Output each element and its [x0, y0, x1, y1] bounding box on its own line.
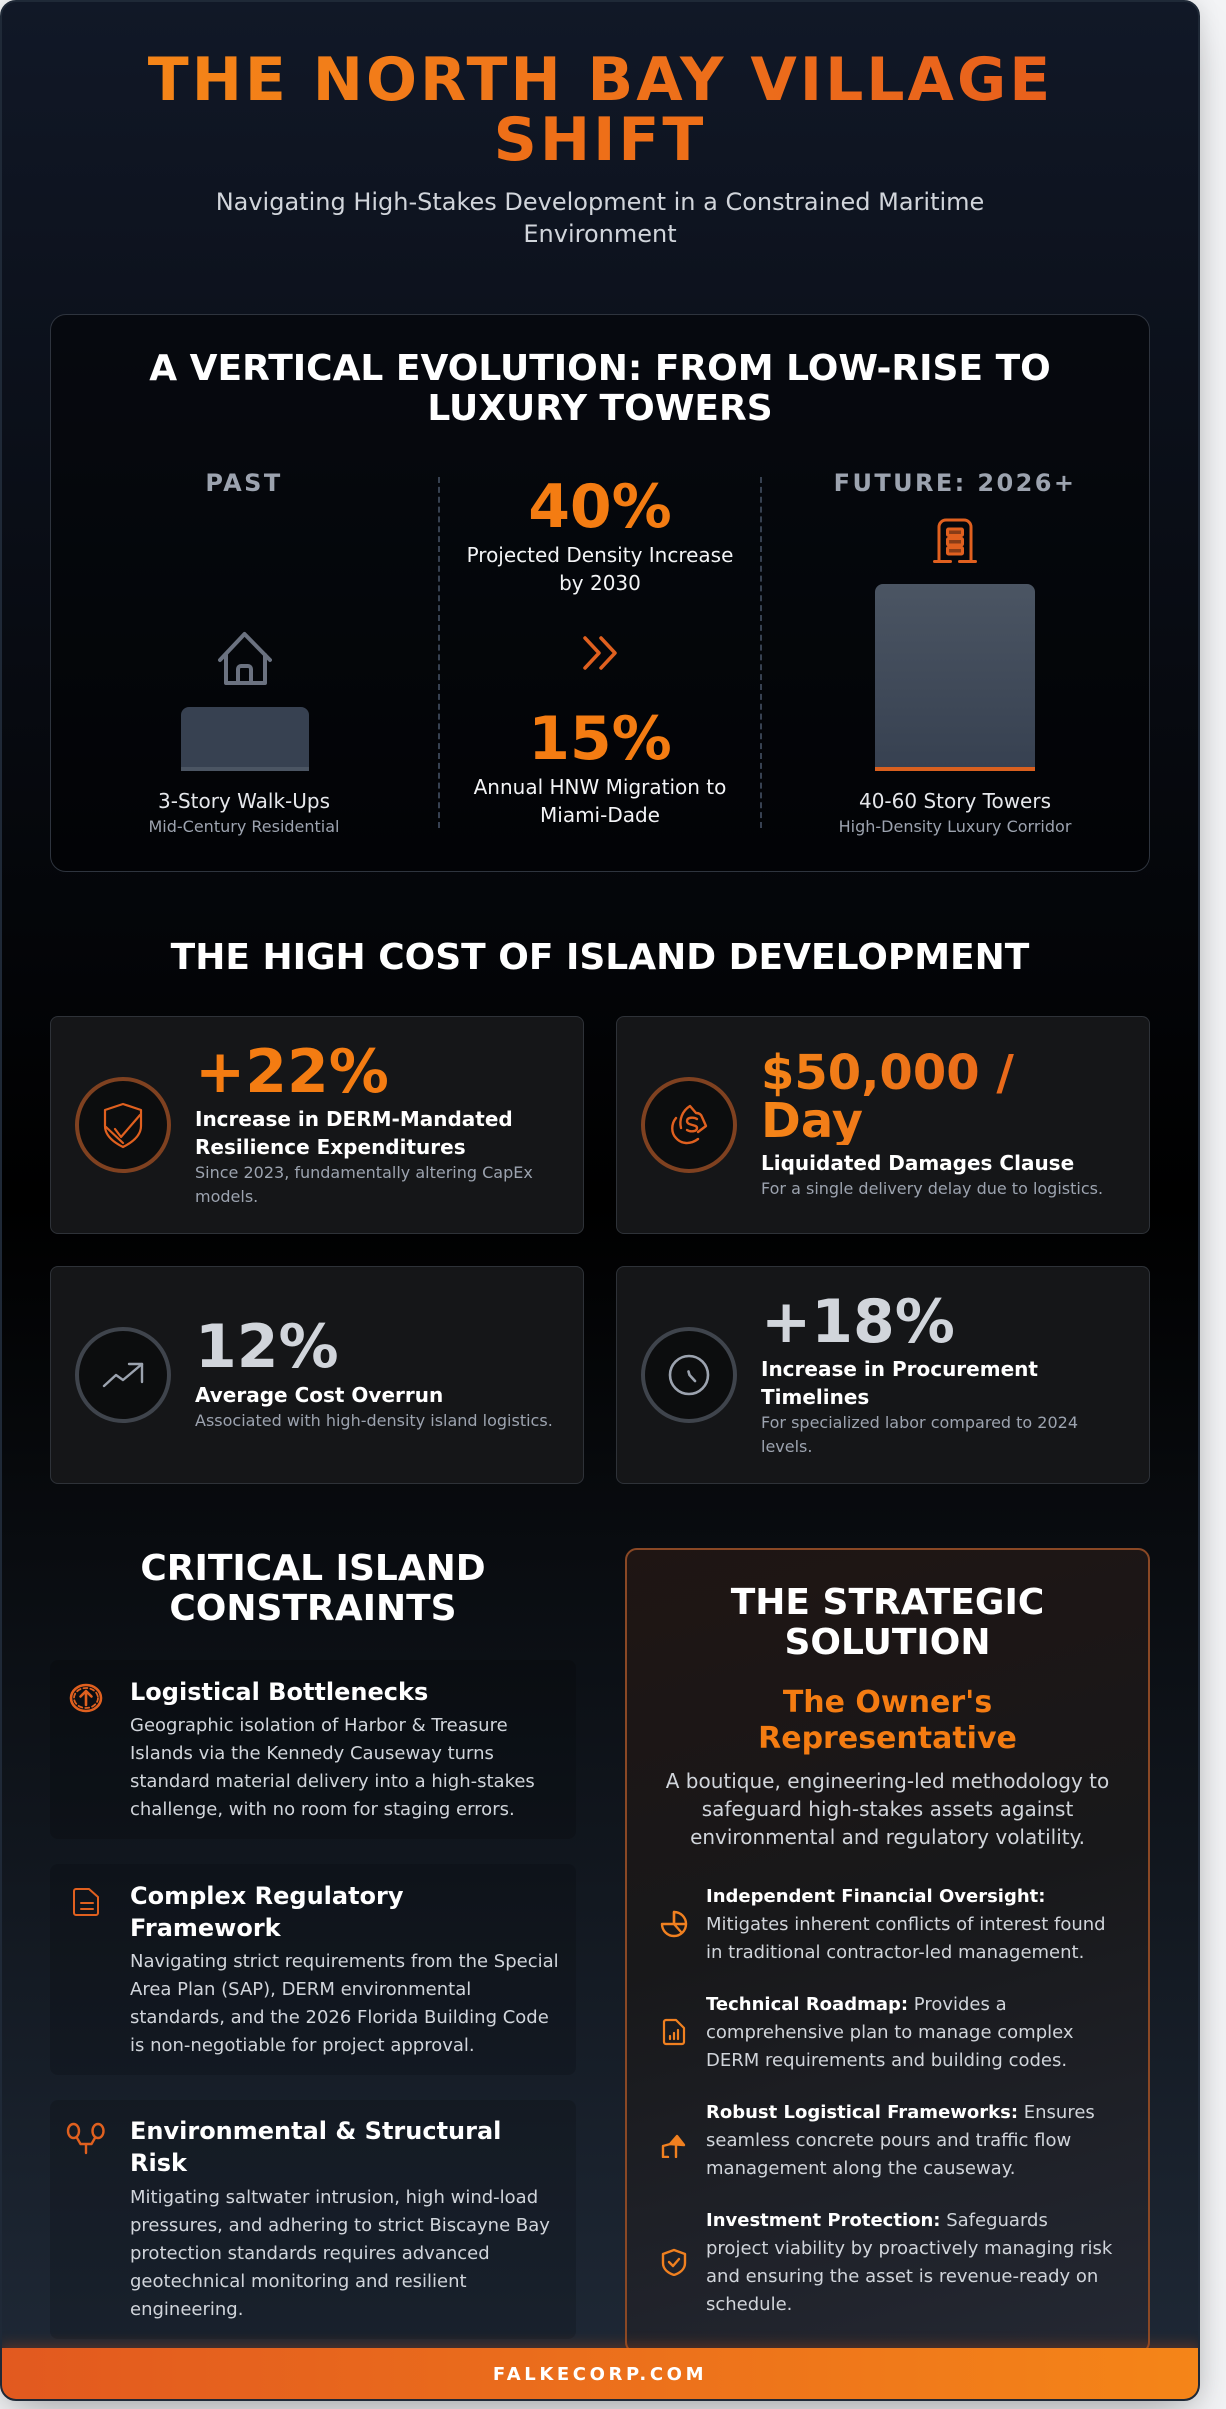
stat description: models. — [195, 1187, 258, 1206]
stat description — [761, 1413, 1078, 1456]
intro text: environmental and regulatory volatility. — [690, 1825, 1085, 1849]
icon: branches — [66, 2122, 105, 2154]
title: THE NORTH BAY VILLAGE — [148, 45, 1053, 115]
stat label — [761, 1357, 1038, 1409]
heading: vertical evolution: LUXURY TOWERS — [427, 388, 773, 429]
constraint text — [130, 1951, 559, 2056]
icon: document — [73, 1888, 99, 1916]
icon: chart document — [662, 2018, 686, 2046]
stat: 40%: 40% — [528, 472, 672, 542]
solution text: Mitigates inherent conflicts of interest found — [706, 1914, 1106, 1935]
constraint title: Framework — [130, 1914, 281, 1942]
card: $50,000 — [616, 1016, 1150, 1234]
solution text: in traditional contractor-led management. — [706, 1942, 1084, 1963]
constraint: regulatory — [50, 1864, 576, 2075]
stat label — [195, 1107, 513, 1159]
solution text — [706, 2210, 1112, 2315]
stat value: $50,000 / — [761, 1045, 1014, 1101]
heading — [730, 1582, 1044, 1663]
constraint title: Complex Regulatory — [130, 1882, 404, 1910]
building: tower block — [875, 584, 1035, 771]
icon ring: money — [641, 1077, 737, 1173]
stat label: Increase in Procurement — [761, 1357, 1038, 1381]
stat description: levels. — [761, 1437, 812, 1456]
heading: critical constraints — [140, 1548, 486, 1629]
constraint text: geotechnical monitoring and resilient — [130, 2271, 467, 2292]
solution text: Technical Roadmap: Provides a — [706, 1994, 1007, 2015]
stat description: Associated with high-density island logistics. — [195, 1411, 553, 1430]
label: future: FUTURE: 2026+ — [834, 469, 1076, 497]
solution text: schedule. — [706, 2294, 792, 2315]
icon: house — [218, 632, 272, 685]
heading: high cost: THE HIGH COST OF ISLAND DEVELOPMENT — [171, 937, 1029, 978]
subtitle: Navigating High-Stakes Development in a Constrained Maritime — [216, 188, 984, 216]
heading: vertical evolution: A VERTICAL EVOLUTION: FROM LOW-RISE TO — [149, 348, 1051, 389]
stat description: For specialized labor compared to 2024 — [761, 1413, 1078, 1432]
constraint text: Mitigating saltwater intrusion, high wind-load — [130, 2187, 538, 2208]
subheading: The Owner's — [783, 1685, 992, 1720]
constraint text: engineering. — [130, 2299, 243, 2320]
constraint text: pressures, and adhering to strict Biscayne Bay — [130, 2215, 550, 2236]
card: +22% — [50, 1016, 584, 1234]
divider right — [760, 477, 762, 828]
heading: critical constraints: CRITICAL ISLAND — [140, 1548, 486, 1589]
constraint text: standards, and the 2026 Florida Building Code — [130, 2007, 549, 2028]
solution text: Robust Logistical Frameworks: Ensures — [706, 2102, 1095, 2123]
stat value — [761, 1049, 1014, 1145]
constraint: environmental — [50, 2100, 576, 2339]
solution text — [706, 2102, 1095, 2179]
icon: chevrons — [583, 636, 617, 670]
text: annual migration: Annual HNW Migration to — [474, 775, 726, 799]
icon: tower — [933, 518, 977, 563]
divider left — [438, 477, 440, 828]
stat description — [195, 1163, 533, 1206]
icon: gear arrow — [70, 1684, 102, 1712]
icon ring: clock — [641, 1327, 737, 1423]
intro text: safeguard high-stakes assets against — [702, 1797, 1073, 1821]
constraint text: Islands via the Kennedy Causeway turns — [130, 1743, 494, 1764]
solution: logistics — [662, 2102, 1095, 2179]
caption: mid-century residential: Mid-Century Residential — [148, 817, 340, 836]
heading: vertical evolution — [149, 348, 1051, 429]
stat value: Day — [761, 1093, 863, 1149]
stat label: Timelines — [761, 1385, 869, 1409]
icon ring: shield — [75, 1077, 171, 1173]
constraint title: Risk — [130, 2149, 187, 2177]
stat value: 12% — [195, 1312, 339, 1382]
text: projected density — [467, 543, 733, 595]
text: annual migration: Miami-Dade — [540, 803, 660, 827]
icon: shield check — [662, 2248, 686, 2276]
icon: arrow up crane — [662, 2134, 686, 2158]
constraint text: challenge, with no room for staging errors. — [130, 1799, 515, 1820]
subtitle: Environment — [523, 220, 677, 248]
heading: THE STRATEGIC — [731, 1582, 1044, 1623]
stat description: For a single delivery delay due to logistics. — [761, 1179, 1103, 1198]
card: +18% — [616, 1266, 1150, 1484]
constraint title — [130, 2117, 501, 2177]
stat: 15%: 15% — [528, 704, 672, 774]
text: annual migration — [474, 775, 726, 827]
caption: 3-story walk-ups: 3-Story Walk-Ups — [158, 789, 330, 813]
panel: strategic solution — [625, 1548, 1150, 2354]
constraint text: standard material delivery into a high-stakes — [130, 1771, 535, 1792]
caption: 40-60 story towers: 40-60 Story Towers — [859, 789, 1051, 813]
icon ring: trend — [75, 1327, 171, 1423]
icon: pie — [660, 1910, 688, 1938]
solution text: management along the causeway. — [706, 2158, 1016, 2179]
heading: SOLUTION — [784, 1622, 991, 1663]
solution: protection — [662, 2210, 1112, 2315]
solution text: and ensuring the asset is revenue-ready on — [706, 2266, 1098, 2287]
subtitle — [216, 188, 984, 248]
subheading — [758, 1685, 1017, 1756]
constraint text: Geographic isolation of Harbor & Treasure — [130, 1715, 508, 1736]
text: projected density: Projected Density Increase — [467, 543, 733, 567]
building: low-rise block — [181, 707, 309, 771]
panel: vertical evolution — [50, 314, 1150, 872]
subheading: Representative — [758, 1721, 1017, 1756]
caption: high-density luxury corridor: High-Density Luxury Corridor — [839, 817, 1071, 836]
text: projected density: by 2030 — [559, 571, 641, 595]
constraint text: is non-negotiable for project approval. — [130, 2035, 475, 2056]
footer: FALKECORP.COM — [493, 2364, 707, 2385]
solution text — [706, 1886, 1106, 1963]
intro text — [666, 1769, 1109, 1849]
solution text: project viability by proactively managing risk — [706, 2238, 1112, 2259]
stat label: Liquidated Damages Clause — [761, 1151, 1074, 1175]
intro text: A boutique, engineering-led methodology to — [666, 1769, 1109, 1793]
constraint title — [130, 1882, 404, 1942]
footer — [0, 2348, 1200, 2401]
solution text: Independent Financial Oversight: — [706, 1886, 1045, 1907]
stat description: Since 2023, fundamentally altering CapEx — [195, 1163, 533, 1182]
solution text: DERM requirements and building codes. — [706, 2050, 1067, 2071]
title — [148, 45, 1053, 175]
stat label: Average Cost Overrun — [195, 1383, 443, 1407]
stat value: +18% — [761, 1287, 955, 1357]
solution: oversight — [660, 1886, 1106, 1963]
constraint text: protection standards requires advanced — [130, 2243, 490, 2264]
card: 12% — [50, 1266, 584, 1484]
solution text: seamless concrete pours and traffic flow — [706, 2130, 1071, 2151]
label: past: PAST — [205, 469, 283, 497]
solution: roadmap — [662, 1994, 1074, 2071]
title: SHIFT — [494, 105, 706, 175]
solution text: comprehensive plan to manage complex — [706, 2022, 1074, 2043]
constraint text — [130, 1715, 535, 1820]
solution text: Investment Protection: Safeguards — [706, 2210, 1048, 2231]
constraint text: Area Plan (SAP), DERM environmental — [130, 1979, 471, 2000]
heading: critical constraints: CONSTRAINTS — [169, 1588, 457, 1629]
constraint text: Navigating strict requirements from the Special — [130, 1951, 559, 1972]
constraint title: Logistical Bottlenecks — [130, 1678, 428, 1706]
constraint: logistical — [50, 1660, 576, 1839]
stat label: Resilience Expenditures — [195, 1135, 466, 1159]
constraint title: Environmental & Structural — [130, 2117, 501, 2145]
constraint text — [130, 2187, 550, 2320]
stat label: Increase in DERM-Mandated — [195, 1107, 513, 1131]
stat value: +22% — [195, 1037, 389, 1107]
solution text — [706, 1994, 1074, 2071]
